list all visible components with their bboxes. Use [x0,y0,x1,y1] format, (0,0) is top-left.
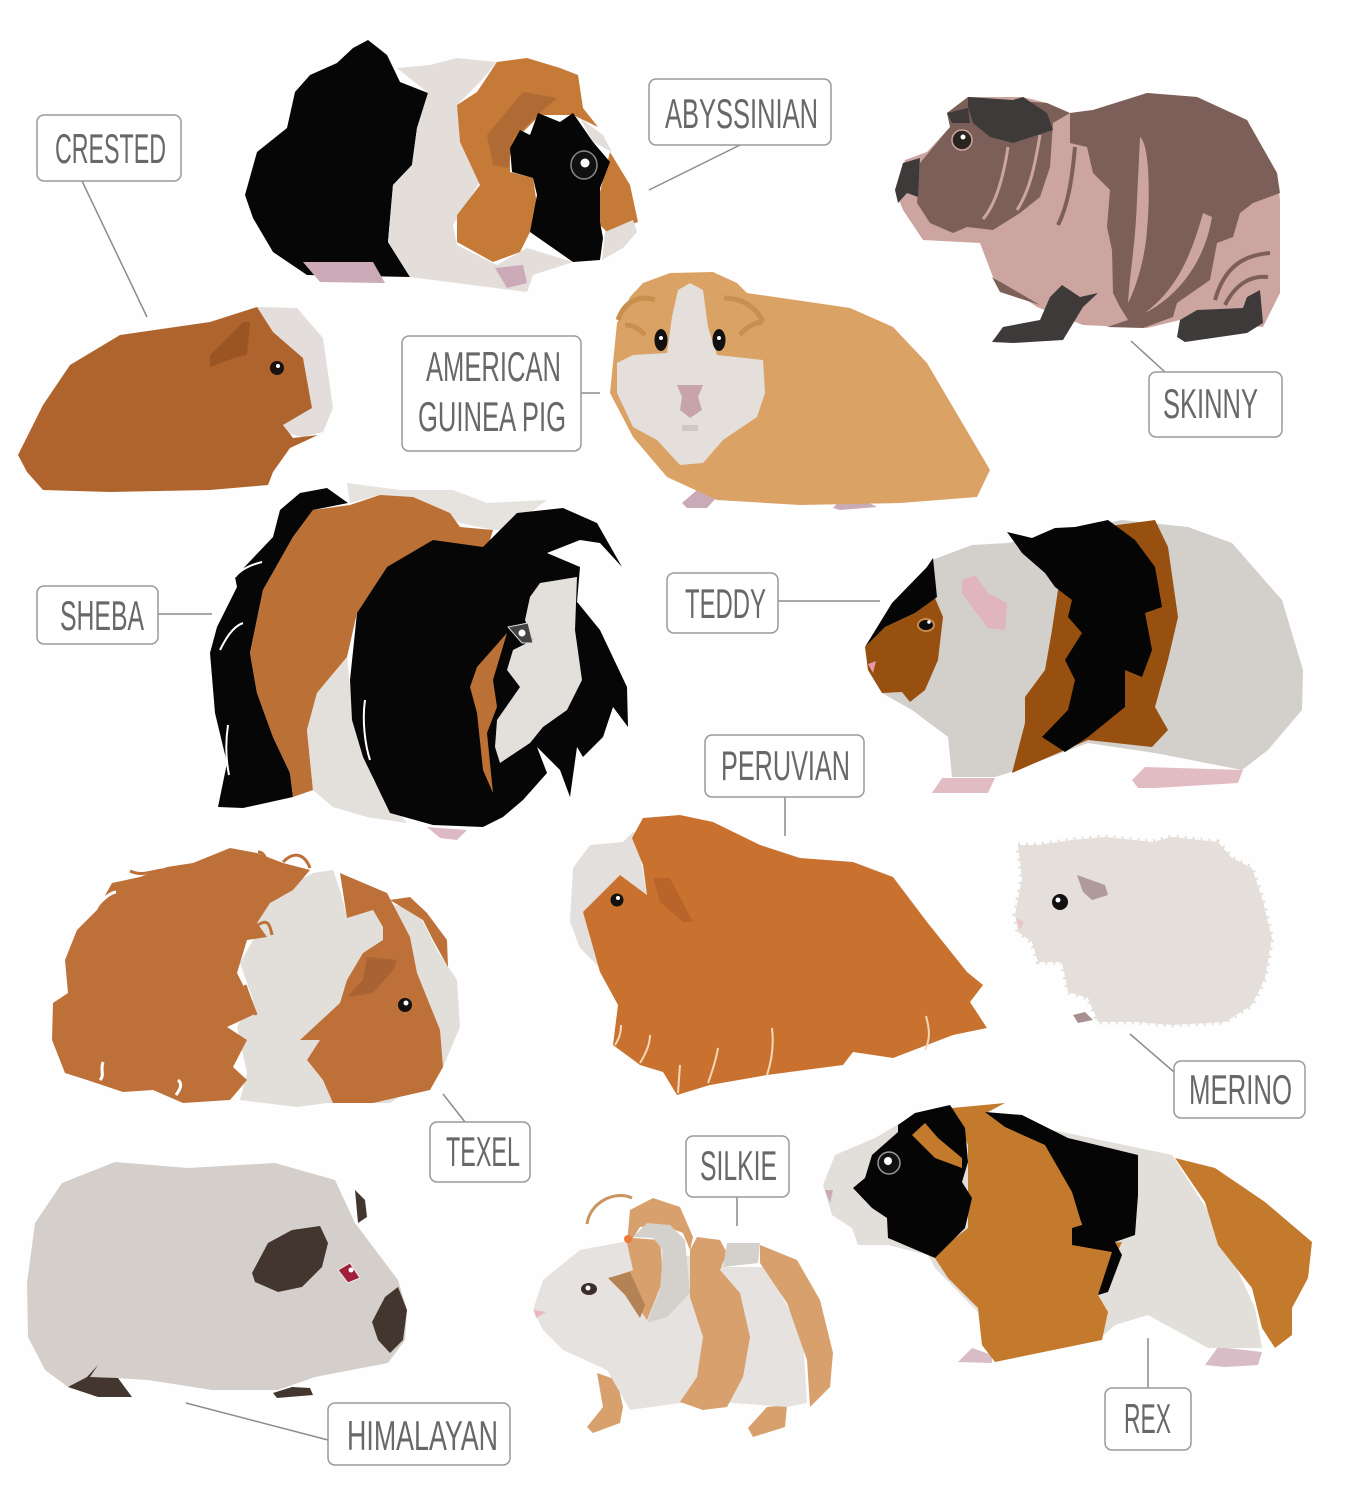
label: crested [37,115,181,181]
guinea pig: abyssinian [245,40,638,292]
guinea pig: merino [1015,837,1272,1025]
label: himalayan: HIMALAYAN [347,1412,498,1459]
label: american guinea pig: AMERICAN [426,343,561,390]
guinea pig: skinny [895,93,1280,343]
guinea pig: himalayan [27,1162,407,1398]
guinea pig: teddy [865,520,1303,793]
label: crested: CRESTED [55,125,166,172]
label: rex: REX [1124,1395,1171,1442]
label: abyssinian: ABYSSINIAN [665,90,818,137]
label: american guinea pig [402,336,581,451]
label: skinny [1149,372,1282,437]
guinea pig: sheba [210,483,628,840]
guinea pig: rex [823,1103,1312,1367]
label: texel: TEXEL [446,1128,520,1175]
label: american guinea pig: GUINEA PIG [418,393,566,440]
label: teddy: TEDDY [685,580,766,627]
guinea pig: crested [18,307,333,492]
label: peruvian [705,735,864,797]
label: abyssinian [649,79,831,145]
label: merino [1174,1061,1305,1118]
label: sheba: SHEBA [60,592,144,639]
label: texel [430,1122,530,1182]
label: teddy [667,573,778,633]
guinea pig: peruvian [570,815,987,1095]
label: sheba [37,586,158,644]
label: himalayan [328,1403,510,1465]
guinea pig: silkie [533,1196,833,1437]
guinea pig: american [610,272,990,510]
eye [571,151,597,179]
label: rex [1105,1388,1191,1450]
leader lines [82,145,1174,1440]
label: skinny: SKINNY [1163,380,1258,427]
label: silkie [686,1136,789,1197]
label: peruvian: PERUVIAN [721,742,850,789]
guinea pig: texel [52,848,460,1107]
label: silkie: SILKIE [700,1142,777,1189]
